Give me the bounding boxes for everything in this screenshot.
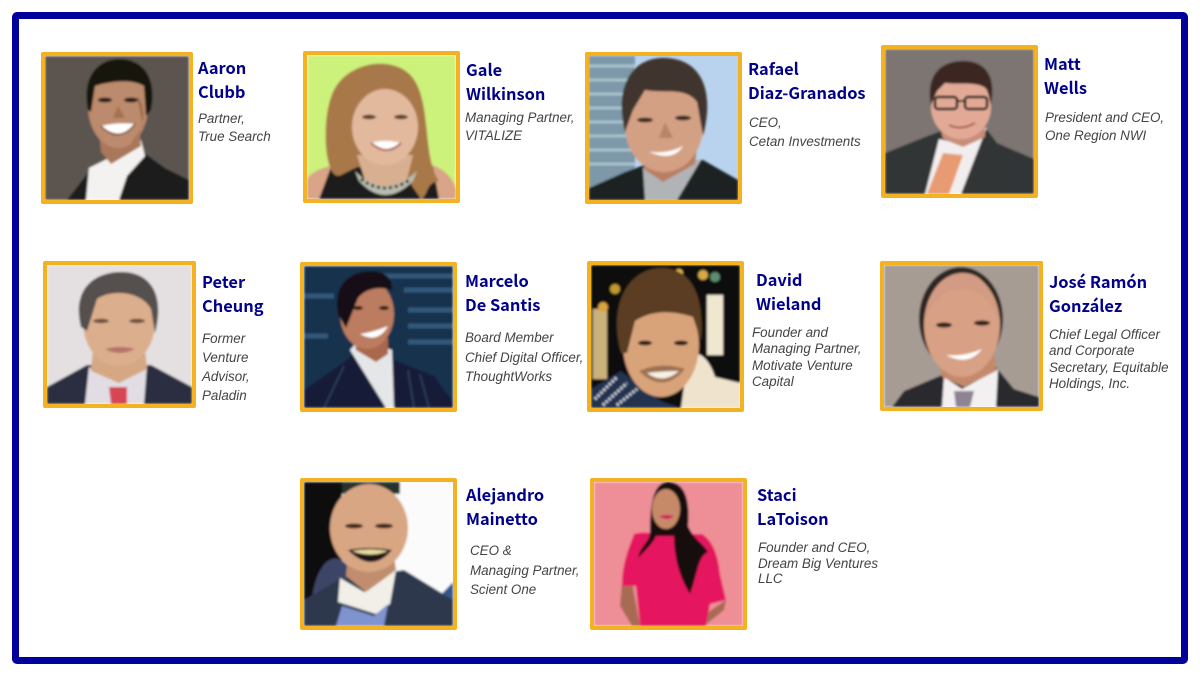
role — [1045, 110, 1164, 143]
role: Partner, — [198, 111, 245, 126]
name: Matt — [1044, 51, 1081, 75]
photo: David Wieland — [587, 261, 744, 412]
role — [1049, 327, 1169, 391]
name: Wells — [1044, 74, 1087, 98]
name: Aaron — [198, 55, 246, 79]
role: VITALIZE — [465, 128, 522, 143]
role — [198, 111, 271, 144]
role: Venture — [202, 350, 248, 365]
role: Chief Digital Officer, — [465, 350, 583, 364]
panel: Aaron Clubb — [41, 52, 271, 204]
role: Former — [202, 331, 245, 346]
role: Board Member — [465, 330, 554, 345]
role: Chief Legal Officer — [1049, 327, 1160, 342]
panel: Marcelo De Santis — [300, 262, 583, 412]
name — [1044, 51, 1087, 98]
name — [1049, 269, 1147, 316]
role: CEO & — [470, 543, 512, 558]
role: Managing Partner, — [470, 562, 579, 578]
photo: Peter Cheung — [43, 261, 196, 408]
panel: Matt Wells — [881, 45, 1164, 198]
photo: Gale Wilkinson — [303, 51, 460, 203]
role: Advisor, — [202, 369, 250, 384]
role — [465, 110, 574, 143]
role: True Search — [198, 129, 271, 144]
role: Holdings, Inc. — [1049, 376, 1130, 391]
role: and Corporate — [1049, 343, 1135, 358]
photo: Marcelo De Santis — [300, 262, 457, 412]
role: Paladin — [202, 388, 247, 403]
photo: Staci LaToison — [590, 478, 747, 630]
name: Cheung — [202, 292, 264, 316]
role — [470, 543, 579, 597]
name: Gale — [466, 57, 502, 81]
name: José Ramón — [1049, 269, 1147, 293]
role: Cetan Investments — [749, 134, 861, 149]
name — [756, 267, 821, 314]
name: De Santis — [465, 292, 540, 316]
role — [201, 331, 250, 403]
name: Clubb — [198, 78, 245, 102]
role — [465, 330, 583, 384]
name: González — [1049, 292, 1122, 316]
name: Rafael — [748, 56, 799, 80]
panel: Rafael Diaz-Granados — [585, 52, 866, 204]
name: Staci — [757, 482, 797, 506]
role: Scient One — [470, 582, 536, 597]
photo: José Ramón González — [880, 261, 1043, 411]
role: LLC — [758, 571, 783, 586]
role — [752, 325, 861, 389]
panel: David Wieland — [587, 261, 861, 412]
role — [758, 540, 878, 586]
role: ThoughtWorks — [465, 369, 552, 384]
photo: Aaron Clubb — [41, 52, 193, 204]
name — [466, 57, 545, 104]
role — [749, 115, 861, 149]
role: CEO, — [749, 115, 782, 130]
name: Alejandro — [466, 482, 544, 506]
name: Diaz-Granados — [748, 80, 866, 104]
name — [465, 268, 540, 316]
name — [748, 56, 866, 104]
name: LaToison — [757, 506, 829, 530]
name: Wieland — [756, 290, 821, 314]
photo: Matt Wells — [881, 45, 1038, 198]
role: Founder and — [752, 325, 828, 340]
name: Mainetto — [466, 506, 538, 530]
role: Dream Big Ventures — [758, 556, 878, 571]
role: Managing Partner, — [752, 341, 861, 356]
role: Capital — [752, 374, 794, 389]
panel: Peter Cheung — [43, 261, 264, 408]
photo: Alejandro Mainetto — [300, 478, 457, 630]
panel: Alejandro Mainetto — [300, 478, 579, 630]
name — [198, 55, 246, 102]
name — [757, 482, 829, 530]
name: David — [756, 267, 802, 291]
name — [202, 269, 264, 316]
panel: José Ramón González — [880, 261, 1169, 411]
name: Marcelo — [465, 268, 529, 292]
name: Wilkinson — [466, 80, 545, 104]
role: One Region NWI — [1045, 128, 1146, 143]
role: Managing Partner, — [465, 110, 574, 125]
panel: Staci LaToison — [590, 478, 878, 630]
name — [466, 482, 544, 530]
panel: Gale Wilkinson — [303, 51, 574, 203]
role: Founder and CEO, — [758, 540, 870, 555]
name: Peter — [202, 269, 245, 293]
role: Motivate Venture — [752, 358, 853, 373]
role: President and CEO, — [1045, 110, 1164, 125]
role: Secretary, Equitable — [1049, 360, 1169, 375]
photo: Rafael Diaz-Granados — [585, 52, 742, 204]
